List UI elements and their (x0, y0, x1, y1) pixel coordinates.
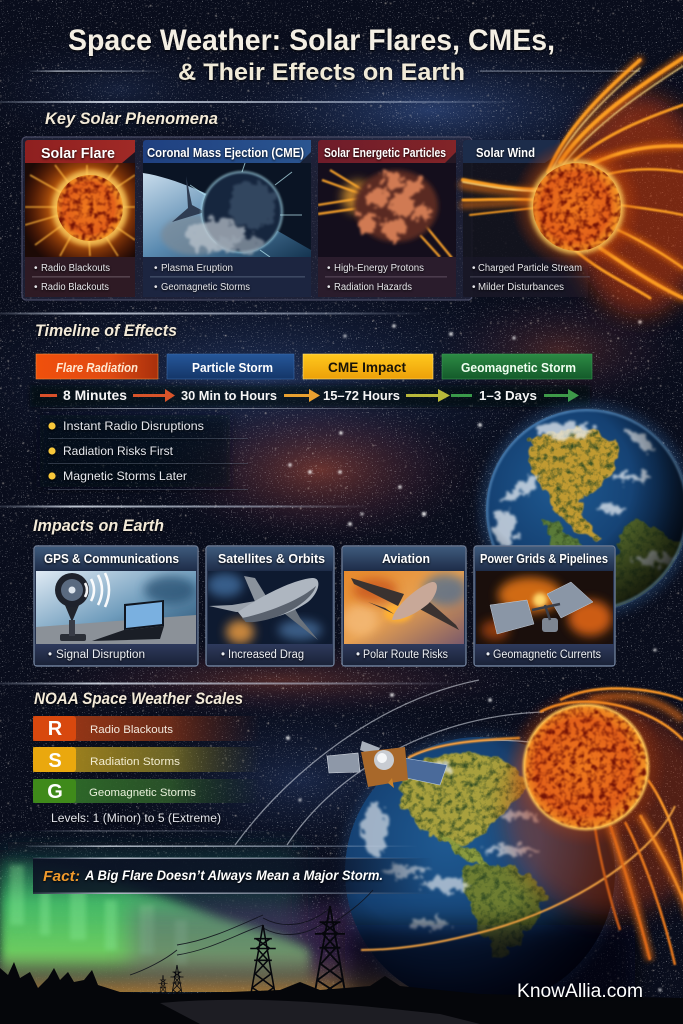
scale r: R (48, 718, 63, 740)
stage: flare radiation: Flare Radiation (56, 360, 138, 375)
card: aviation: • (356, 649, 360, 661)
panel: key solar phenomena (19, 58, 683, 315)
card: solar flare (25, 140, 135, 297)
card: solar wind with sun: Solar Wind (476, 145, 535, 160)
card: solar wind with sun (463, 58, 683, 315)
callout: fact: Fact: (43, 868, 80, 885)
card: satellites and orbits (206, 546, 334, 666)
card: satellites and orbits: • (221, 649, 225, 661)
scale r (33, 716, 261, 741)
effects list (40, 415, 248, 490)
card: coronal mass ejection: • (154, 263, 158, 274)
card: power grids and pipelines: • (486, 649, 490, 661)
title: & Their Effects on Earth (178, 59, 465, 86)
scale s (33, 747, 261, 772)
brand: knowallia: KnowAllia.com (517, 981, 643, 1002)
card: coronal mass ejection: Coronal Mass Ejection (CME) (147, 145, 304, 160)
card: solar flare: Solar Flare (41, 145, 115, 162)
card: solar flare: Radio Blackouts (41, 282, 109, 293)
panel: impacts on earth (34, 546, 615, 666)
card: solar flare: • (34, 282, 38, 293)
stage: particle storm (167, 354, 294, 379)
effects list: Magnetic Storms Later (63, 469, 187, 483)
arrows and durations: 1–3 Days (479, 388, 537, 403)
scale g: G (47, 781, 63, 803)
stage: particle storm: Particle Storm (192, 360, 273, 375)
card: solar energetic particles (318, 140, 456, 297)
card: gps and communications: GPS & Communications (44, 551, 179, 566)
card: solar wind with sun: • (472, 282, 476, 293)
card: satellites and orbits: Increased Drag (228, 649, 304, 661)
card: power grids and pipelines: Power Grids & Pipelines (480, 551, 608, 566)
stage: cme impact (303, 354, 433, 379)
card: solar wind with sun: Milder Disturbances (478, 282, 564, 293)
stage: cme impact: CME Impact (328, 359, 406, 375)
heading: impacts on earth: Impacts on Earth (33, 516, 164, 535)
card: gps and communications: • (48, 649, 52, 661)
card: gps and communications: Signal Disruption (56, 649, 145, 661)
card: aviation: Aviation (382, 551, 430, 566)
panel: timeline (30, 354, 592, 490)
arrows and durations: 15–72 Hours (323, 388, 400, 403)
card: solar energetic particles: • (327, 282, 331, 293)
card: solar flare: • (34, 263, 38, 274)
card: coronal mass ejection: Plasma Eruption (161, 263, 233, 274)
scale s: Radiation Storms (90, 756, 181, 768)
illustration: satellite (327, 741, 447, 788)
sun rays: solar wind (463, 58, 683, 315)
levels note: Levels: 1 (Minor) to 5 (Extreme) (51, 813, 221, 825)
heading: timeline of effects: Timeline of Effects (35, 321, 177, 340)
card: power grids and pipelines: Geomagnetic Currents (493, 649, 601, 661)
card: coronal mass ejection (143, 140, 311, 297)
scale r: Radio Blackouts (90, 724, 174, 736)
aurora and horizon (0, 850, 480, 992)
stage: geomagnetic storm (442, 354, 592, 379)
card: solar wind with sun: • (472, 263, 476, 274)
card: satellites and orbits: Satellites & Orbits (218, 551, 325, 566)
callout: fact: A Big Flare Doesn’t Always Mean a Major Storm. (84, 867, 383, 883)
card: gps and communications (34, 546, 198, 666)
illustration: earth upper (479, 402, 683, 620)
scale g: Geomagnetic Storms (89, 787, 197, 799)
callout: fact (28, 846, 433, 894)
card: solar energetic particles: • (327, 263, 331, 274)
arrows and durations: 8 Minutes (63, 387, 127, 403)
card: power grids and pipelines (474, 546, 615, 666)
title (30, 24, 640, 86)
title: Space Weather: Solar Flares, CMEs, (68, 24, 555, 57)
arrows and durations (30, 385, 590, 409)
arrows and durations: 30 Min to Hours (181, 388, 277, 403)
card: coronal mass ejection: Geomagnetic Storms (161, 282, 250, 293)
card: coronal mass ejection: • (154, 282, 158, 293)
effects list: Instant Radio Disruptions (63, 419, 204, 433)
scale s: S (48, 750, 62, 772)
card: solar energetic particles: High-Energy Protons (334, 263, 424, 274)
illustration: earth lower (340, 732, 635, 1020)
panel: noaa scales (33, 716, 265, 831)
heading: key solar phenomena: Key Solar Phenomena (45, 109, 218, 128)
heading: noaa space weather scales: NOAA Space Weather Scales (34, 689, 243, 708)
card: solar energetic particles: Radiation Hazards (334, 282, 412, 293)
scale g (33, 779, 261, 803)
illustration: power lines and treeline (0, 890, 683, 1024)
stage: geomagnetic storm: Geomagnetic Storm (461, 360, 576, 375)
stage: flare radiation (36, 354, 158, 379)
card: solar energetic particles: Solar Energetic Particles (324, 145, 446, 160)
card: aviation: Polar Route Risks (363, 649, 448, 661)
effects list: Radiation Risks First (63, 444, 174, 458)
card: solar flare: Radio Blackouts (41, 263, 110, 274)
card: solar wind with sun: Charged Particle Stream (478, 263, 582, 274)
illustration: sun with magnetic field lines (235, 680, 683, 965)
card: aviation (342, 546, 467, 666)
